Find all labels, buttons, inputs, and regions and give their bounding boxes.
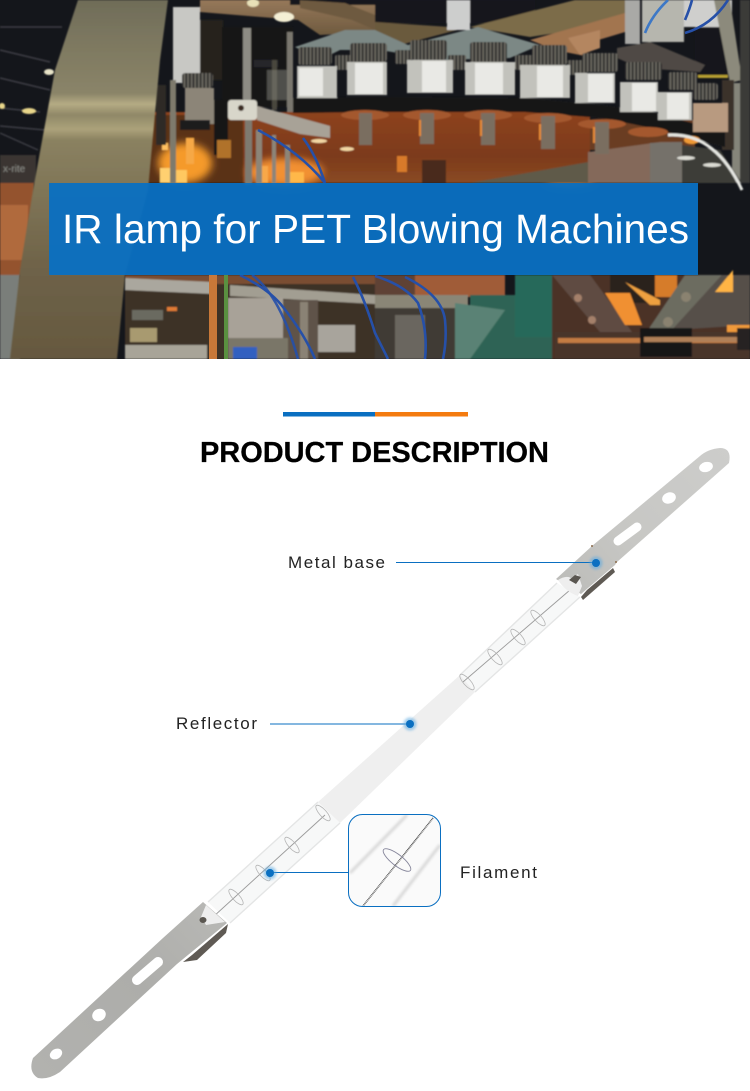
hot glow [158,143,212,183]
dark center column [422,160,446,183]
cylinder [257,106,330,138]
teal glass [470,295,552,359]
gears [182,40,718,100]
product: IR lamp [31,448,730,1078]
banner [49,183,698,275]
cables [213,275,226,359]
reflector strip [318,675,475,823]
left machine parts [185,88,214,124]
ceiling beam behind [200,0,375,35]
orange discs and stems [341,110,668,137]
lower metal base [31,902,228,1078]
lights [274,12,294,22]
wall-mounted block right [588,142,682,183]
callout: metal base: Metal base [288,553,385,572]
cylinder rod bottom right [726,331,738,334]
dark recess behind carriage [199,20,223,80]
lower glass tube [208,802,340,923]
filament detail inset [348,814,440,906]
area below banner, middle [375,275,415,297]
area below banner, left [125,275,375,359]
upper beams right [470,0,628,37]
banner title: IR lamp for PET Blowing Machines [62,206,689,252]
copper wall behind machine [143,112,590,183]
frames and hot zone bottom right [551,275,728,359]
white tube right [668,135,742,190]
callout: reflector [176,714,416,733]
ceiling lights under disks [311,139,327,143]
black ring [293,97,725,147]
callout: filament [264,814,537,906]
gold curved panel [10,0,168,359]
steel column [173,7,200,83]
upper metal base [556,448,730,600]
blocks [297,60,728,132]
hero photo: PET blowing machine [0,0,750,359]
black carriage [222,27,293,107]
section heading: PRODUCT DESCRIPTION [200,437,549,469]
left background wall [0,155,36,183]
upper glass tube [458,583,580,692]
section divider [283,412,468,416]
callout: reflector: Reflector [176,714,257,733]
callout: metal base [288,553,602,572]
gray top plates [295,27,540,60]
hero photo: PET blowing machine: x-rite [3,164,26,175]
blue tubes [240,0,728,359]
callout: filament: Filament [460,863,537,882]
upper right machinery [625,0,640,44]
truss ceiling lines [0,27,62,150]
